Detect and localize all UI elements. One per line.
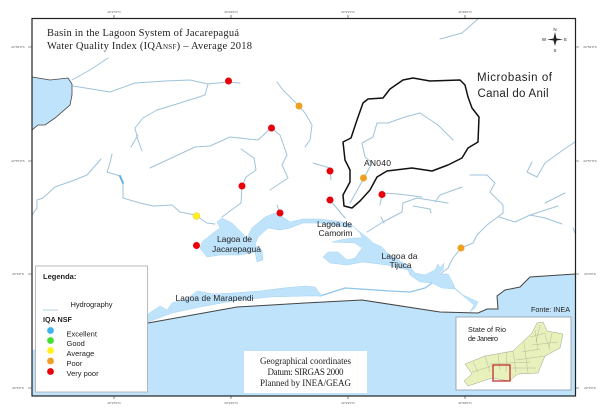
title: Basin in the Lagoon System of Jacarepaguá [47, 28, 239, 39]
coordinate ticks and labels: 43°18'0"O [458, 401, 472, 405]
hydrography [32, 19, 575, 296]
coordinate ticks and labels: 23°0'0"S [12, 272, 24, 276]
Lagoa de Jacarepaguá water [200, 213, 352, 262]
coordinate ticks and labels: 23°0'0"S [584, 272, 596, 276]
place labels: Fonte: INEA [531, 305, 570, 314]
Lagoa de Marapendi water [148, 286, 322, 322]
inset map: State of Rio [468, 325, 506, 334]
legend panel: Very poor [66, 369, 99, 378]
coordinate ticks and labels: 43°21'0"O [341, 401, 355, 405]
coordinate ticks and labels: 22°54'0"S [583, 45, 597, 49]
coordinate ticks and labels: 23°3'0"S [584, 386, 596, 390]
coordinate ticks and labels: 43°27'0"O [107, 10, 121, 14]
coordinates note: Datum: SIRGAS 2000 [268, 367, 344, 377]
icon: north arrow: E [564, 37, 567, 42]
place labels: Jacarepaguá [212, 244, 261, 254]
legend panel: Hydrography [70, 300, 113, 309]
place labels: Microbasin of [477, 72, 553, 84]
Lagoa da Tijuca water [323, 225, 478, 312]
legend panel: Poor [66, 359, 83, 368]
microbasin outline [343, 78, 479, 208]
legend panel [36, 266, 148, 392]
place labels [176, 72, 570, 314]
icon: north arrow: N [553, 27, 557, 32]
monitoring points [193, 78, 464, 252]
place labels: Lagoa da [382, 251, 418, 261]
coordinates note: Geographical coordinates [260, 356, 351, 366]
coordinate ticks and labels: 22°57'0"S [583, 159, 597, 163]
coordinate ticks and labels: 22°57'0"S [11, 159, 25, 163]
coordinate ticks and labels: 43°24'0"O [224, 401, 238, 405]
coastline [148, 274, 576, 323]
place labels: Camorim [318, 228, 352, 238]
place labels: Lagoa de [217, 234, 252, 244]
title [47, 28, 252, 52]
inset map [456, 317, 571, 390]
legend panel: Average [66, 349, 94, 358]
place labels: Canal do Anil [478, 88, 548, 100]
legend panel: IQA NSF [43, 315, 72, 324]
place labels: Lagoa de Marapendi [176, 293, 254, 303]
title: Water Quality Index (IQANSF) – Average 2018 [47, 41, 252, 52]
northwest lake [32, 77, 72, 130]
legend panel: Legenda: [43, 272, 76, 281]
ocean [32, 274, 576, 396]
coordinates note [244, 351, 367, 393]
legend panel: Good [66, 339, 85, 348]
coordinate ticks and labels: 43°24'0"O [224, 10, 238, 14]
legend panel: Excellent [66, 330, 98, 338]
inset map: de Janeiro [468, 334, 498, 343]
coordinate ticks and labels: 22°54'0"S [11, 45, 25, 49]
icon: north arrow: W [542, 37, 547, 42]
coordinate ticks and labels: 23°3'0"S [12, 386, 24, 390]
coordinates note: Planned by INEA/GEAG [260, 378, 352, 388]
coordinate ticks and labels: 43°27'0"O [107, 401, 121, 405]
coordinate ticks and labels: 43°21'0"O [341, 10, 355, 14]
icon: north arrow [542, 27, 567, 53]
coordinate ticks and labels: 43°18'0"O [458, 10, 472, 14]
place labels: Lagoa de [317, 219, 352, 229]
place labels: Tijuca [390, 260, 412, 270]
icon: north arrow: S [553, 48, 557, 53]
place labels: AN040 [364, 158, 391, 168]
